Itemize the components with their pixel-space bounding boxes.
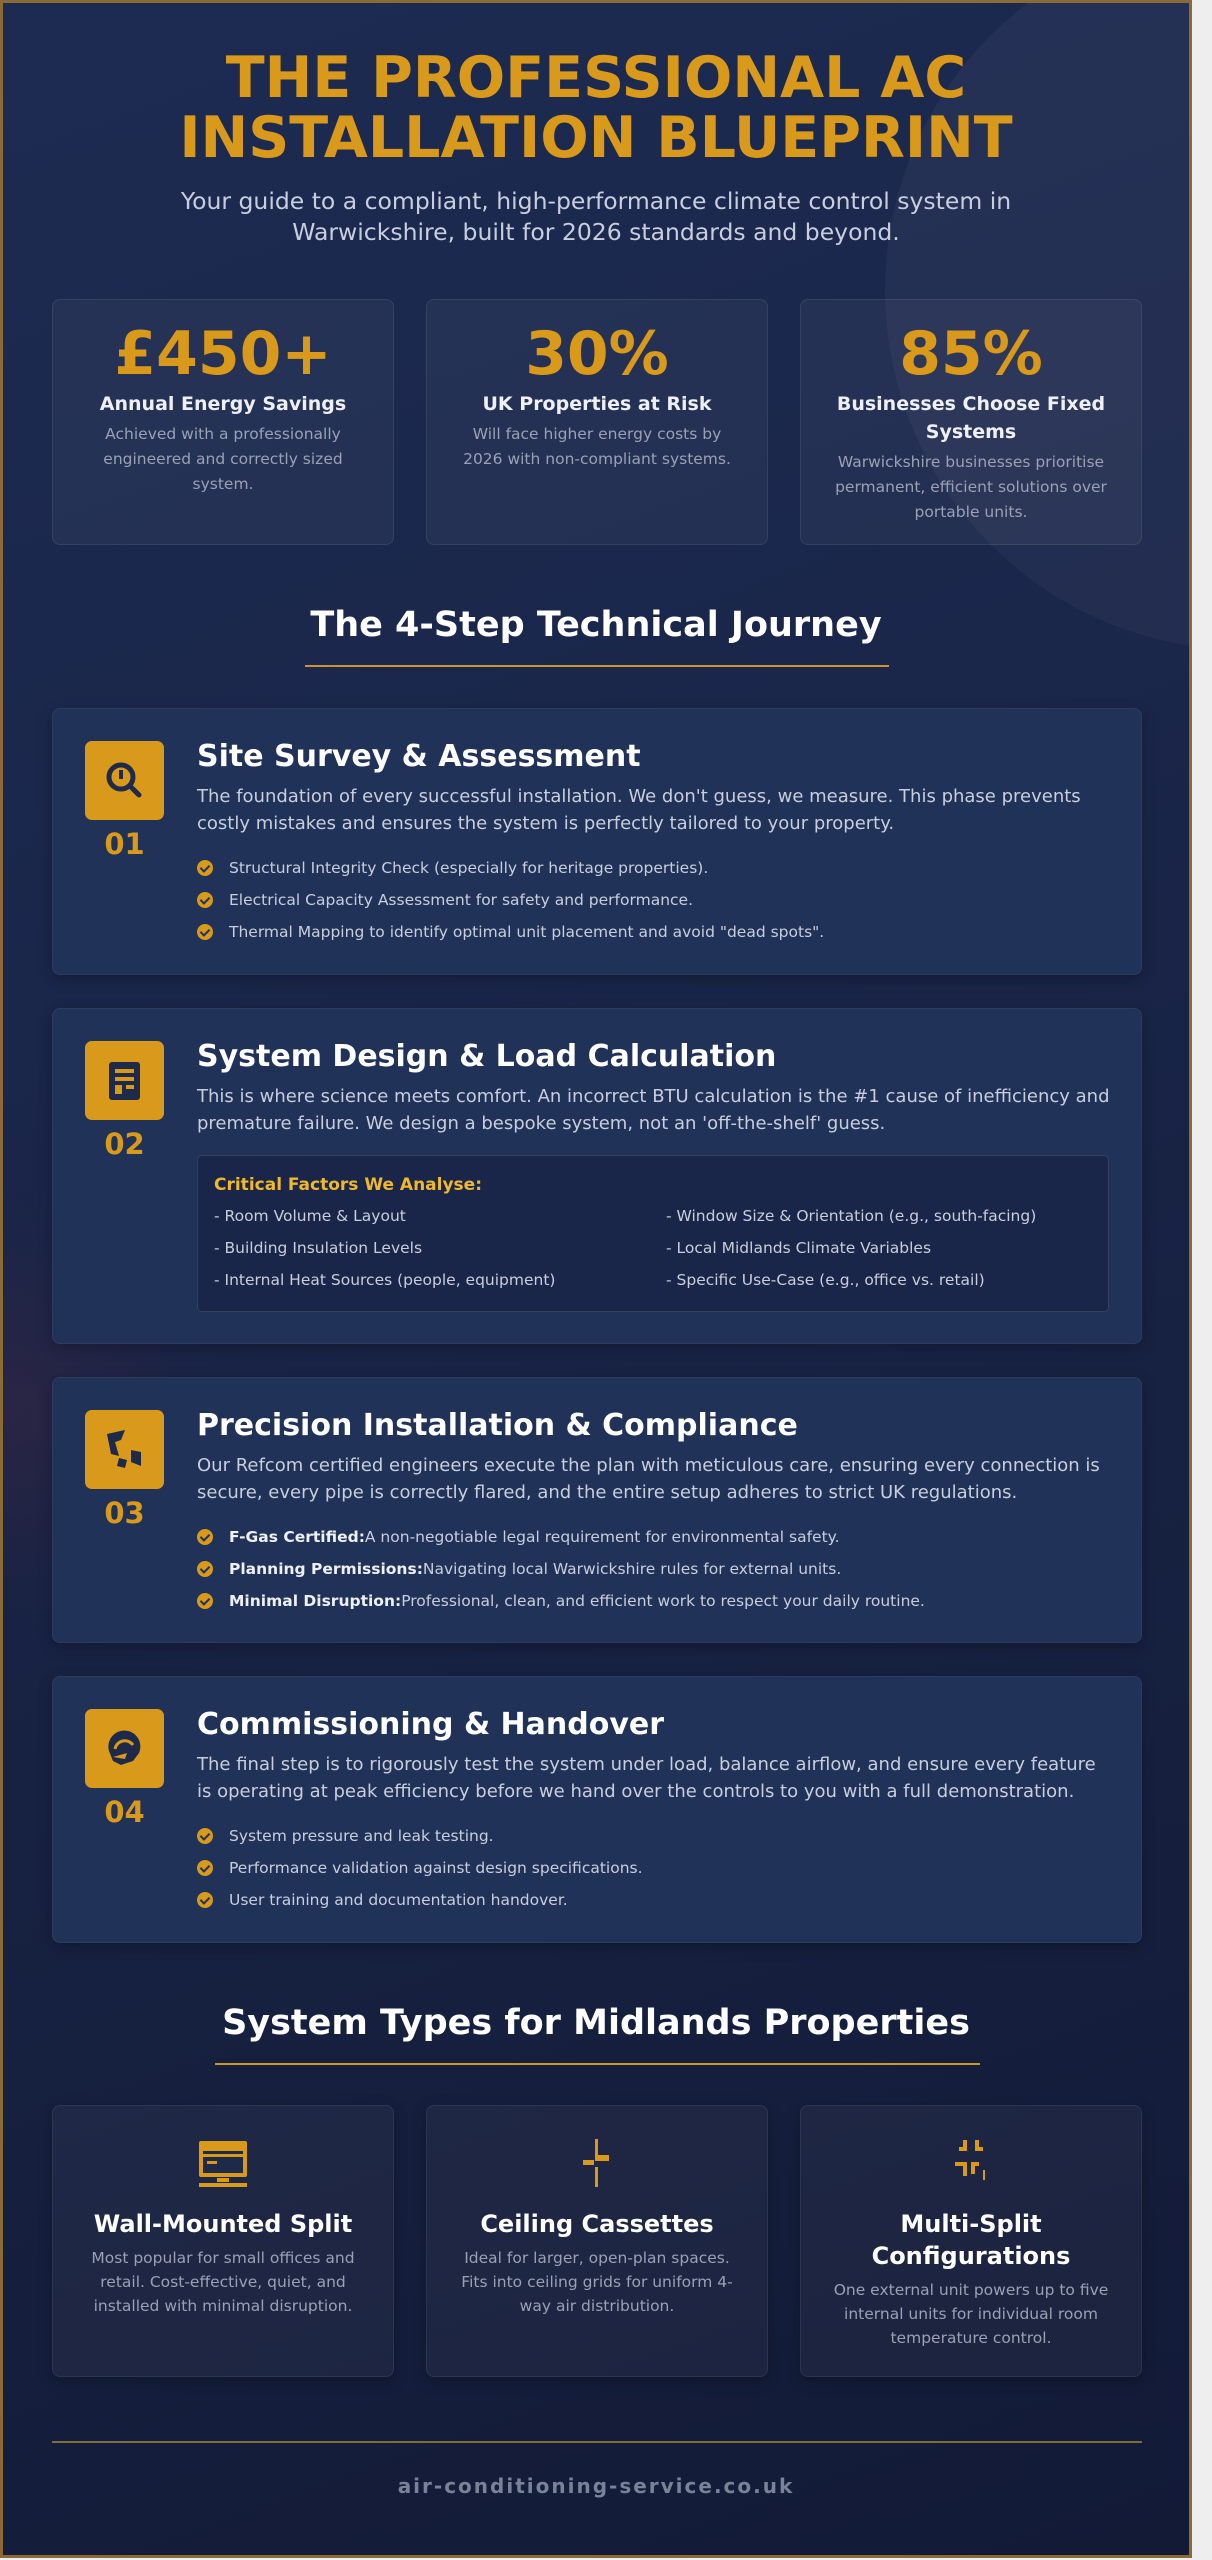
- checklist: Planning Permissions:: [229, 1560, 423, 1578]
- stat card: savings: £450+: [114, 319, 332, 389]
- stat card: properties at risk: Will face higher energy costs by 2026 with non-compliant systems.: [463, 425, 731, 468]
- critical factors box: - Local Midlands Climate Variables: [666, 1239, 931, 1257]
- critical factors box: - Specific Use-Case (e.g., office vs. retail): [666, 1271, 985, 1289]
- stat card: savings: Annual Energy Savings: [100, 393, 346, 415]
- checklist: [197, 1528, 925, 1610]
- type card: ceiling cassettes: Ideal for larger, open-plan spaces. Fits into ceiling grids for uniform 4-way air distribution.: [461, 2249, 733, 2315]
- checklist: Thermal Mapping to identify optimal unit placement and avoid "dead spots".: [229, 923, 824, 941]
- stat card: savings: [52, 299, 394, 545]
- type card: multi-split: One external unit powers up to five internal units for individual room temperature control.: [834, 2281, 1108, 2347]
- critical factors box: - Building Insulation Levels: [214, 1239, 422, 1257]
- step description: The final step is to rigorously test the system under load, balance airflow, and ensure every feature is operating at peak efficiency before we hand over the controls to you with a full demonstration.: [197, 1754, 1096, 1802]
- icon: multi-split: [955, 2140, 985, 2180]
- step title: Commissioning & Handover: [197, 1707, 664, 1742]
- step 3 panel: [52, 1377, 1142, 1643]
- checklist: Navigating local Warwickshire rules for external units.: [423, 1560, 841, 1578]
- critical factors box: - Room Volume & Layout: [214, 1207, 406, 1225]
- critical factors box: Critical Factors We Analyse:: [214, 1175, 482, 1195]
- checklist: System pressure and leak testing.: [229, 1827, 494, 1845]
- step description: Our Refcom certified engineers execute the plan with meticulous care, ensuring every connection is secure, every pipe is correctly flared, and the entire setup adheres to strict UK regulations.: [197, 1455, 1100, 1503]
- step number: 04: [104, 1795, 145, 1829]
- critical factors box: [197, 1155, 1109, 1312]
- type card: multi-split: [800, 2105, 1142, 2377]
- step title: System Design & Load Calculation: [197, 1039, 776, 1074]
- type card: ceiling cassettes: Ceiling Cassettes: [480, 2210, 714, 2238]
- icon: cassette: [583, 2139, 609, 2187]
- step number: 02: [104, 1127, 145, 1161]
- step 4 panel: [52, 1676, 1142, 1943]
- critical factors box: - Internal Heat Sources (people, equipment): [214, 1271, 555, 1289]
- heading: system types: System Types for Midlands Properties: [222, 2003, 970, 2043]
- type card: multi-split: Multi-Split Configurations: [872, 2210, 1070, 2270]
- type card: wall-mounted: [52, 2105, 394, 2377]
- checklist: [197, 859, 824, 941]
- step title: Site Survey & Assessment: [197, 739, 641, 774]
- icon: magnifier: [85, 741, 164, 820]
- checklist: [197, 1827, 643, 1909]
- title: [179, 45, 1013, 171]
- icon: wall unit: [199, 2141, 247, 2187]
- type card: ceiling cassettes: [426, 2105, 768, 2377]
- type card: wall-mounted: Wall-Mounted Split: [94, 2210, 352, 2238]
- subtitle: Your guide to a compliant, high-performance climate control system in Warwickshire, built for 2026 standards and beyond.: [181, 187, 1011, 246]
- checklist: Electrical Capacity Assessment for safety and performance.: [229, 891, 693, 909]
- checklist: Performance validation against design specifications.: [229, 1859, 643, 1877]
- critical factors box: - Window Size & Orientation (e.g., south-facing): [666, 1207, 1036, 1225]
- title: INSTALLATION BLUEPRINT: [179, 105, 1013, 171]
- step description: The foundation of every successful installation. We don't guess, we measure. This phase prevents costly mistakes and ensures the system is perfectly tailored to your property.: [197, 786, 1081, 834]
- checklist: Minimal Disruption:: [229, 1592, 401, 1610]
- step title: Precision Installation & Compliance: [197, 1408, 798, 1443]
- checklist: F-Gas Certified:: [229, 1528, 365, 1546]
- stat card: businesses: 85%: [899, 319, 1043, 389]
- stat card: properties at risk: [426, 299, 768, 545]
- icon: handover gauge: [85, 1709, 164, 1788]
- stat card: businesses: [800, 299, 1142, 545]
- footer url: air-conditioning-service.co.uk: [398, 2474, 794, 2498]
- step number: 01: [104, 827, 145, 861]
- step 1 panel: [52, 708, 1142, 975]
- checklist: Structural Integrity Check (especially for heritage properties).: [229, 859, 708, 877]
- title: THE PROFESSIONAL AC: [226, 45, 966, 111]
- stat card: businesses: Warwickshire businesses prioritise permanent, efficient solutions over portable units.: [835, 453, 1107, 521]
- icon: calculator: [85, 1041, 164, 1120]
- checklist: User training and documentation handover.: [229, 1891, 568, 1909]
- stat card: properties at risk: 30%: [525, 319, 669, 389]
- stat card: businesses: Businesses Choose Fixed Systems: [837, 393, 1105, 443]
- heading: 4-step journey: The 4-Step Technical Journey: [310, 605, 882, 645]
- checklist: A non-negotiable legal requirement for environmental safety.: [365, 1528, 840, 1546]
- checklist: Professional, clean, and efficient work to respect your daily routine.: [401, 1592, 925, 1610]
- step number: 03: [104, 1496, 145, 1530]
- step description: This is where science meets comfort. An incorrect BTU calculation is the #1 cause of inefficiency and premature failure. We design a bespoke system, not an 'off-the-shelf' guess.: [197, 1086, 1110, 1134]
- stat card: savings: Achieved with a professionally engineered and correctly sized system.: [103, 425, 343, 493]
- step 2 panel: [52, 1008, 1142, 1344]
- type card: wall-mounted: Most popular for small offices and retail. Cost-effective, quiet, and installed with minimal disruption.: [91, 2249, 355, 2315]
- icon: tools: [85, 1410, 164, 1489]
- stat card: properties at risk: UK Properties at Risk: [482, 393, 711, 415]
